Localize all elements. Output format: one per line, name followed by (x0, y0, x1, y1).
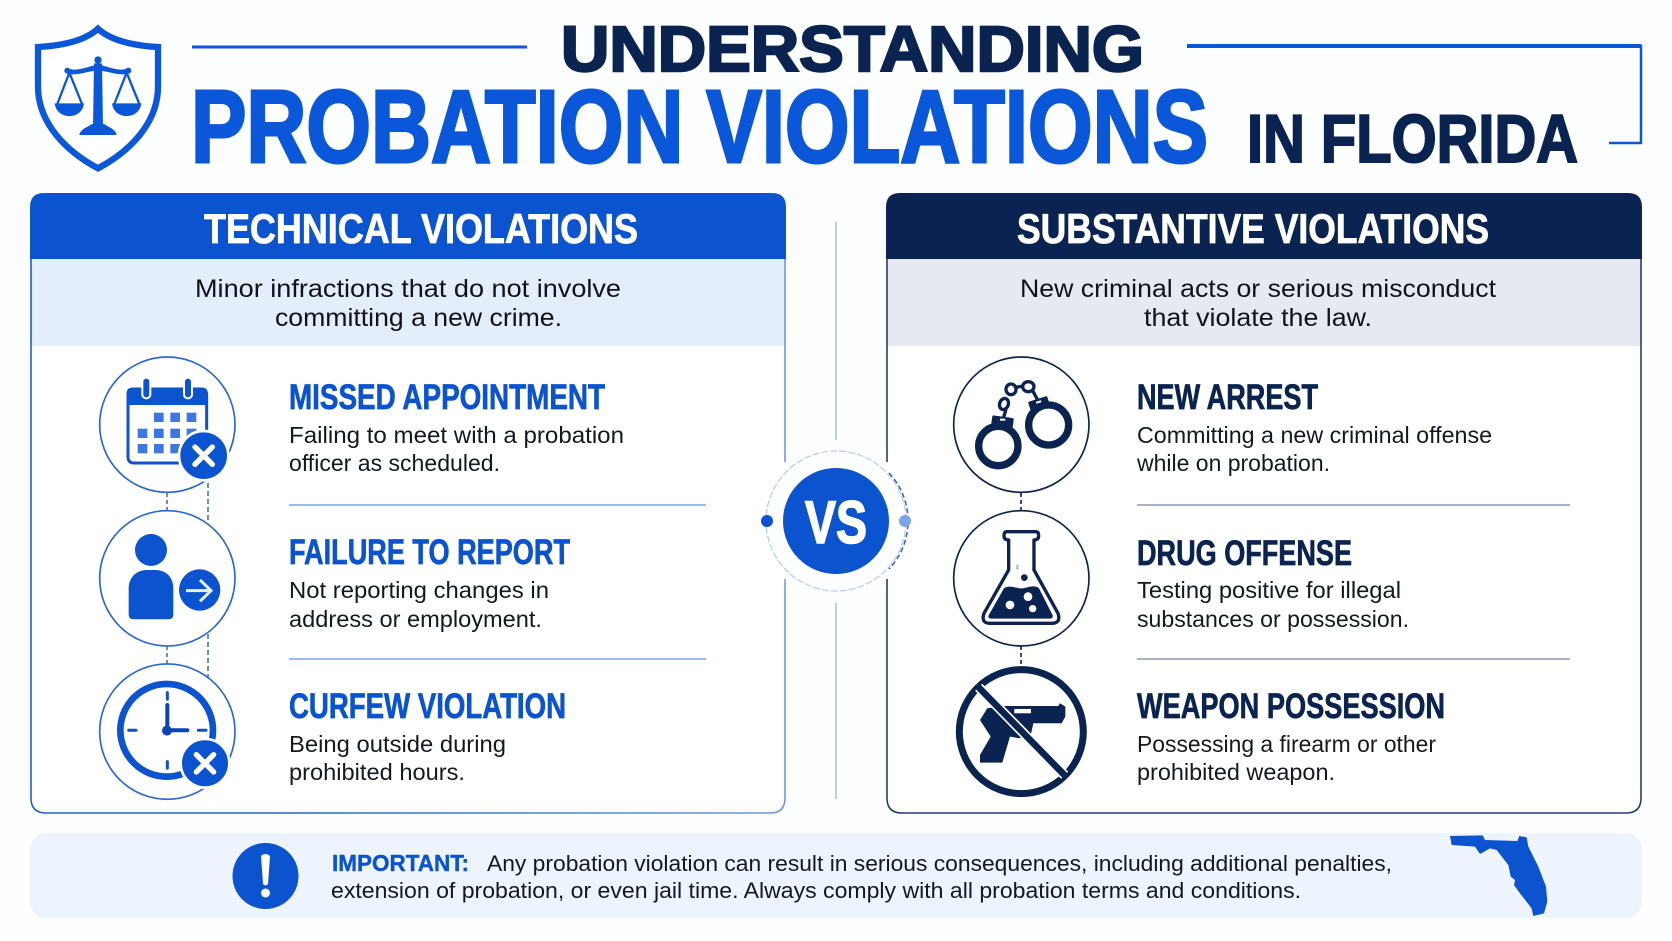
icon: clock with X (100, 664, 235, 799)
icon: exclamation mark (232, 843, 298, 909)
item: weapon possession: Possessing a firearm or other (1137, 731, 1436, 757)
item: new arrest (1136, 378, 1492, 476)
item: new arrest: while on probation. (1136, 450, 1330, 476)
panel header: technical violations (30, 193, 786, 259)
item: missed appointment: MISSED APPOINTMENT (289, 378, 605, 417)
item: curfew violation (289, 687, 566, 785)
panel description (886, 259, 1642, 346)
icon: handcuffs (954, 357, 1089, 492)
item: weapon possession (1137, 687, 1445, 785)
item: drug offense: DRUG OFFENSE (1137, 534, 1352, 573)
panel: substantive violations (886, 193, 1642, 813)
callout text: Any probation violation can result in serious consequences, including additional penalties, (487, 851, 1392, 876)
icon: person with arrow (100, 511, 235, 646)
panel header: substantive violations: SUBSTANTIVE VIOLATIONS (1017, 205, 1489, 252)
item: failure to report (289, 533, 570, 632)
item: drug offense: Testing positive for illegal (1137, 577, 1401, 603)
panel description: that violate the law. (1144, 304, 1372, 332)
item: weapon possession: WEAPON POSSESSION (1137, 687, 1445, 726)
icon: Florida map (1450, 835, 1547, 916)
callout: important notice (30, 833, 1642, 918)
icon: calendar with X (100, 357, 235, 492)
item: curfew violation: Being outside during (289, 731, 506, 757)
item: missed appointment: officer as scheduled. (289, 450, 500, 476)
item: failure to report: Not reporting changes in (289, 577, 549, 603)
item: curfew violation: CURFEW VIOLATION (289, 687, 566, 726)
item: missed appointment (289, 378, 624, 476)
panel header: technical violations: TECHNICAL VIOLATIONS (204, 205, 638, 252)
icon: shield with scales of justice (38, 29, 158, 168)
panel description (30, 259, 786, 346)
title line: PROBATION VIOLATIONS: PROBATION VIOLATIONS (191, 69, 1208, 184)
VS badge (761, 451, 911, 591)
callout text (331, 850, 1392, 903)
icon: flask (954, 511, 1089, 646)
callout text: IMPORTANT: (332, 850, 469, 876)
item: missed appointment: Failing to meet with a probation (289, 422, 624, 448)
panel header: substantive violations (886, 193, 1642, 259)
item: curfew violation: prohibited hours. (289, 759, 465, 785)
panel: technical violations (30, 193, 786, 813)
panel description: Minor infractions that do not involve (195, 275, 621, 303)
title line: IN FLORIDA: IN FLORIDA (1247, 101, 1578, 177)
item: weapon possession: prohibited weapon. (1137, 759, 1335, 785)
title line: UNDERSTANDING: UNDERSTANDING (561, 13, 1144, 85)
VS badge: VS (805, 489, 867, 556)
item: new arrest: Committing a new criminal offense (1137, 422, 1492, 448)
item: failure to report: address or employment. (289, 606, 542, 632)
title (191, 13, 1578, 184)
item: failure to report: FAILURE TO REPORT (289, 533, 570, 572)
panel description: New criminal acts or serious misconduct (1020, 275, 1496, 303)
item: drug offense (1137, 534, 1409, 632)
icon: prohibited firearm (959, 670, 1083, 794)
item: drug offense: substances or possession. (1137, 606, 1409, 632)
callout text: extension of probation, or even jail time. Always comply with all probation terms and conditions. (331, 878, 1301, 903)
panel description: committing a new crime. (275, 304, 562, 332)
item: new arrest: NEW ARREST (1137, 378, 1318, 417)
